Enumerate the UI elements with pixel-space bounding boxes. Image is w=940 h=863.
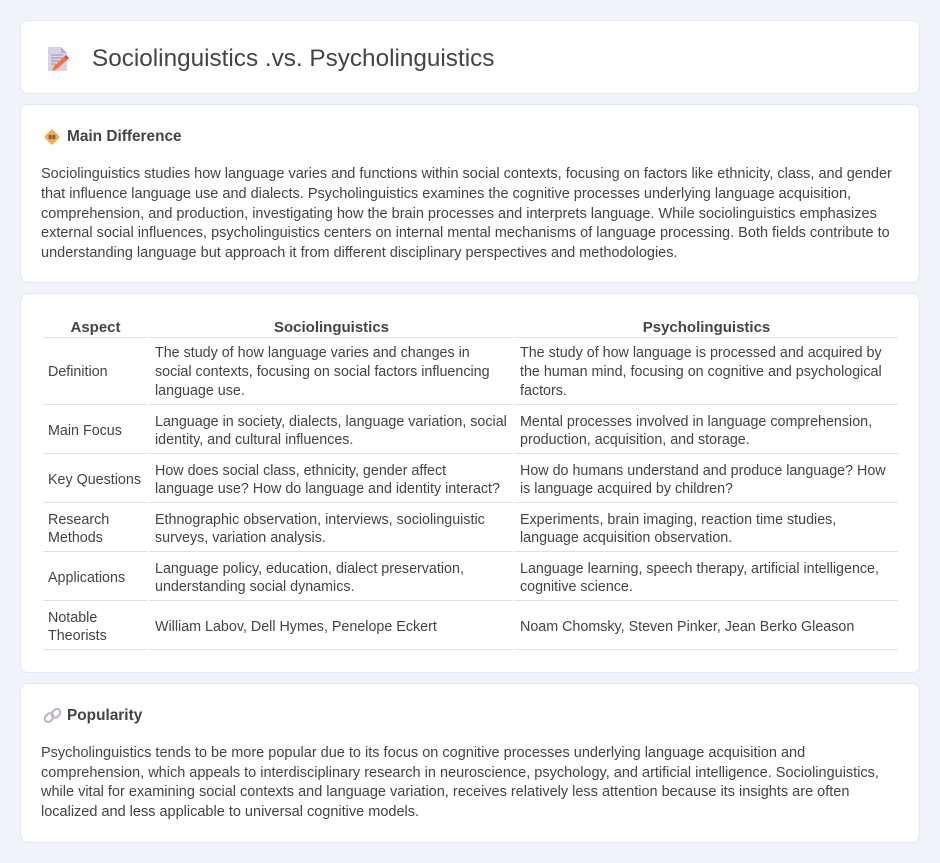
heading: popularity: Popularity	[67, 707, 142, 724]
text block: main difference: that influence language use and dialects. Psycholinguistics examines the cognitive processes underlying language acquisition,	[41, 186, 851, 202]
table header: Psycholinguistics	[643, 319, 770, 336]
table rows: William Labov, Dell Hymes, Penelope Eckert	[155, 619, 437, 635]
table rows: factors.	[520, 383, 567, 399]
text block: popularity: comprehension, which appeals to interdisciplinary research in neuroscience, psychology, and artificial intelligence. Sociolinguistics,	[41, 765, 879, 781]
table rows: language acquisition observation.	[520, 530, 732, 546]
table header	[70, 319, 770, 336]
table rows: Methods	[48, 530, 103, 546]
table rows: Experiments, brain imaging, reaction time studies,	[520, 512, 836, 528]
title: Sociolinguistics .vs. Psycholinguistics	[92, 45, 494, 72]
icon: diamond sign	[44, 129, 60, 145]
table rows: The study of how language varies and changes in	[155, 345, 470, 361]
panel: popularity	[20, 683, 920, 843]
table header: Sociolinguistics	[274, 319, 389, 336]
table rows: Notable	[48, 610, 97, 626]
text block: main difference: understanding language but approach it from different disciplinary perspectives and methodologies.	[41, 245, 678, 261]
table rows: Key Questions	[48, 472, 141, 488]
table header: Aspect	[70, 319, 121, 336]
table rows: Ethnographic observation, interviews, sociolinguistic	[155, 512, 485, 528]
table rows: identity, and cultural influences.	[155, 432, 353, 448]
panel: comparison table	[20, 293, 920, 673]
table rows: How does social class, ethnicity, gender affect	[155, 463, 446, 479]
text block: popularity: while vital for examining social contexts and language variation, receives relatively less attention because its insights are often	[41, 784, 849, 800]
table rows: the human mind, focusing on cognitive and psychological	[520, 364, 882, 380]
text block: main difference	[41, 166, 892, 261]
table rows: language use? How do language and identity interact?	[155, 481, 500, 497]
table rows: is language acquired by children?	[520, 481, 733, 497]
panel: main difference	[20, 104, 920, 283]
table rows: understanding social dynamics.	[155, 579, 354, 595]
table rows: surveys, variation analysis.	[155, 530, 326, 546]
text block: popularity: localized and less applicable to universal cognitive models.	[41, 804, 419, 820]
table rows: Language policy, education, dialect preservation,	[155, 561, 464, 577]
table rows: Main Focus	[48, 423, 122, 439]
table rows: Mental processes involved in language comprehension,	[520, 414, 872, 430]
text block: popularity: Psycholinguistics tends to be more popular due to its focus on cognitive processes underlying language acquisition and	[41, 745, 805, 761]
table rows: Research	[48, 512, 109, 528]
icon: document with pencil	[48, 47, 69, 71]
table rows: The study of how language is processed and acquired by	[520, 345, 882, 361]
table rows: Definition	[48, 364, 108, 380]
heading: main difference: Main Difference	[67, 128, 182, 145]
table rows	[43, 337, 898, 650]
table rows: Noam Chomsky, Steven Pinker, Jean Berko Gleason	[520, 619, 854, 635]
text block: main difference: Sociolinguistics studies how language varies and functions within social contexts, focusing on factors like ethnicity, class, and gender	[41, 166, 892, 182]
text block: main difference: comprehension, and production, investigating how the brain processes and interprets language. While sociolinguistics emphasizes	[41, 206, 877, 222]
table rows: How do humans understand and produce language? How	[520, 463, 886, 479]
table rows: Language learning, speech therapy, artificial intelligence,	[520, 561, 879, 577]
table rows: cognitive science.	[520, 579, 633, 595]
icon: link	[44, 708, 61, 724]
table rows: language use.	[155, 383, 245, 399]
panel: header	[20, 20, 920, 94]
table rows: Language in society, dialects, language variation, social	[155, 414, 507, 430]
table rows: Theorists	[48, 628, 107, 644]
table rows: production, acquisition, and storage.	[520, 432, 750, 448]
table rows: social contexts, focusing on social factors influencing	[155, 364, 490, 380]
text block: main difference: external social influences, psycholinguistics centers on internal mental mechanisms of language processing. Both fields contribute to	[41, 225, 890, 241]
table rows: Applications	[48, 570, 125, 586]
text block: popularity	[41, 745, 879, 820]
